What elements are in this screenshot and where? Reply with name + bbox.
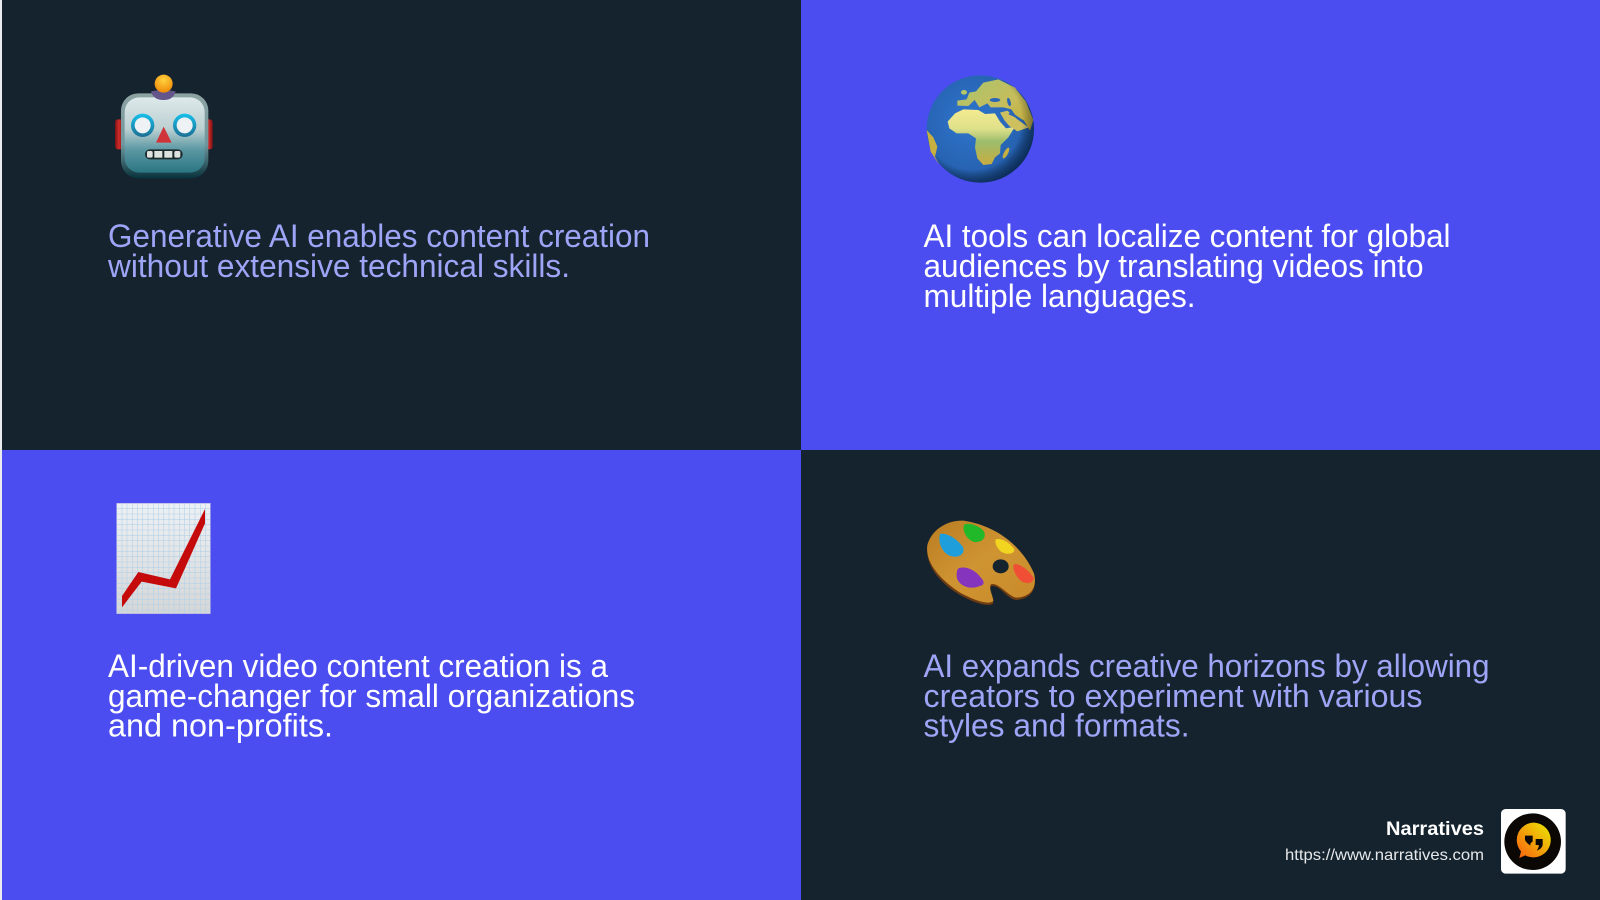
icon: globe — [927, 75, 1034, 183]
brand name: Narratives — [1386, 819, 1484, 840]
text: generative AI: Generative AI enables content creation — [108, 218, 650, 254]
panel: creative horizons — [801, 450, 1600, 900]
icon: robot face — [115, 75, 213, 178]
panel: global localization — [801, 0, 1600, 450]
icon: chart increasing — [117, 503, 210, 614]
text: creative horizons: styles and formats. — [924, 708, 1190, 744]
brand URL: https://www.narratives.com — [1285, 847, 1484, 864]
icon: artist palette — [927, 521, 1035, 605]
text: creative horizons — [924, 648, 1490, 744]
panel: generative AI — [2, 0, 801, 450]
text: localization: multiple languages. — [924, 278, 1196, 314]
panel: small organizations — [2, 450, 801, 900]
text: small organizations — [108, 648, 635, 744]
text: localization: AI tools can localize content for global — [924, 218, 1450, 254]
text: localization — [924, 218, 1450, 314]
text: small organizations: and non-profits. — [108, 708, 333, 744]
icon: brand logo — [1501, 809, 1566, 874]
text: small organizations: game-changer for small organizations — [108, 678, 635, 714]
text: generative AI: without extensive technical skills. — [107, 248, 570, 284]
text: localization: audiences by translating videos into — [924, 248, 1424, 284]
text: small organizations: AI-driven video content creation is a — [108, 648, 608, 684]
text: creative horizons: creators to experiment with various — [924, 678, 1422, 714]
text: creative horizons: AI expands creative horizons by allowing — [924, 648, 1490, 684]
text: generative AI — [107, 218, 650, 284]
